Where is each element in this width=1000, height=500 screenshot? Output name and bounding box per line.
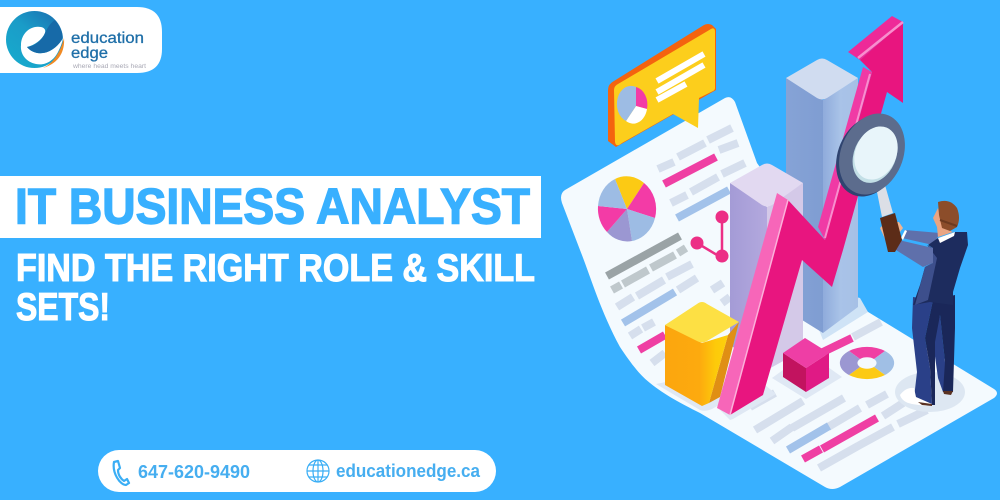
arrow: rising trend <box>717 16 903 415</box>
logo panel: edge <box>71 45 108 62</box>
bar: purple <box>730 164 803 370</box>
donut chart <box>840 347 894 379</box>
bubble pie chart <box>617 86 647 124</box>
paper sheet <box>561 97 997 489</box>
speech bubble <box>608 24 716 147</box>
paper pie chart <box>598 176 656 241</box>
hands <box>880 222 903 240</box>
icon: phone <box>114 461 129 485</box>
subtitle: SETS! <box>16 286 110 329</box>
icon: globe <box>307 460 329 482</box>
contact pill <box>98 450 496 492</box>
logo wordmark: education <box>71 30 144 47</box>
bar: yellow cube <box>665 302 739 406</box>
jacket <box>913 232 968 305</box>
title band: IT BUSINESS ANALYST <box>15 178 530 234</box>
logo tagline: where head meets heart <box>72 63 146 70</box>
hair <box>938 201 959 231</box>
website: educationedge.ca <box>336 461 481 481</box>
far arm <box>902 230 940 245</box>
bubble text lines <box>657 54 704 100</box>
illustration <box>561 16 997 489</box>
logo panel <box>0 7 162 73</box>
shoes <box>900 388 932 406</box>
right leg <box>933 315 947 392</box>
box: pink cube <box>783 338 829 392</box>
floor shadows <box>656 375 742 411</box>
neck and face <box>933 208 953 237</box>
magnifying glass <box>824 103 917 217</box>
dark trouser shading <box>925 295 955 405</box>
person shadow <box>895 372 965 412</box>
phone number: 647-620-9490 <box>138 462 250 482</box>
bar: tall blue <box>786 58 858 333</box>
collar <box>938 232 955 243</box>
left leg <box>912 297 933 405</box>
icon: education edge swirl <box>6 11 64 68</box>
subtitle: FIND THE RIGHT ROLE & SKILL <box>16 247 535 290</box>
magnifier grip <box>880 213 902 252</box>
paper node diagram <box>690 210 728 262</box>
person <box>880 201 968 406</box>
paper data rows <box>607 128 927 468</box>
subtitle <box>16 247 535 329</box>
near arm <box>888 238 933 267</box>
